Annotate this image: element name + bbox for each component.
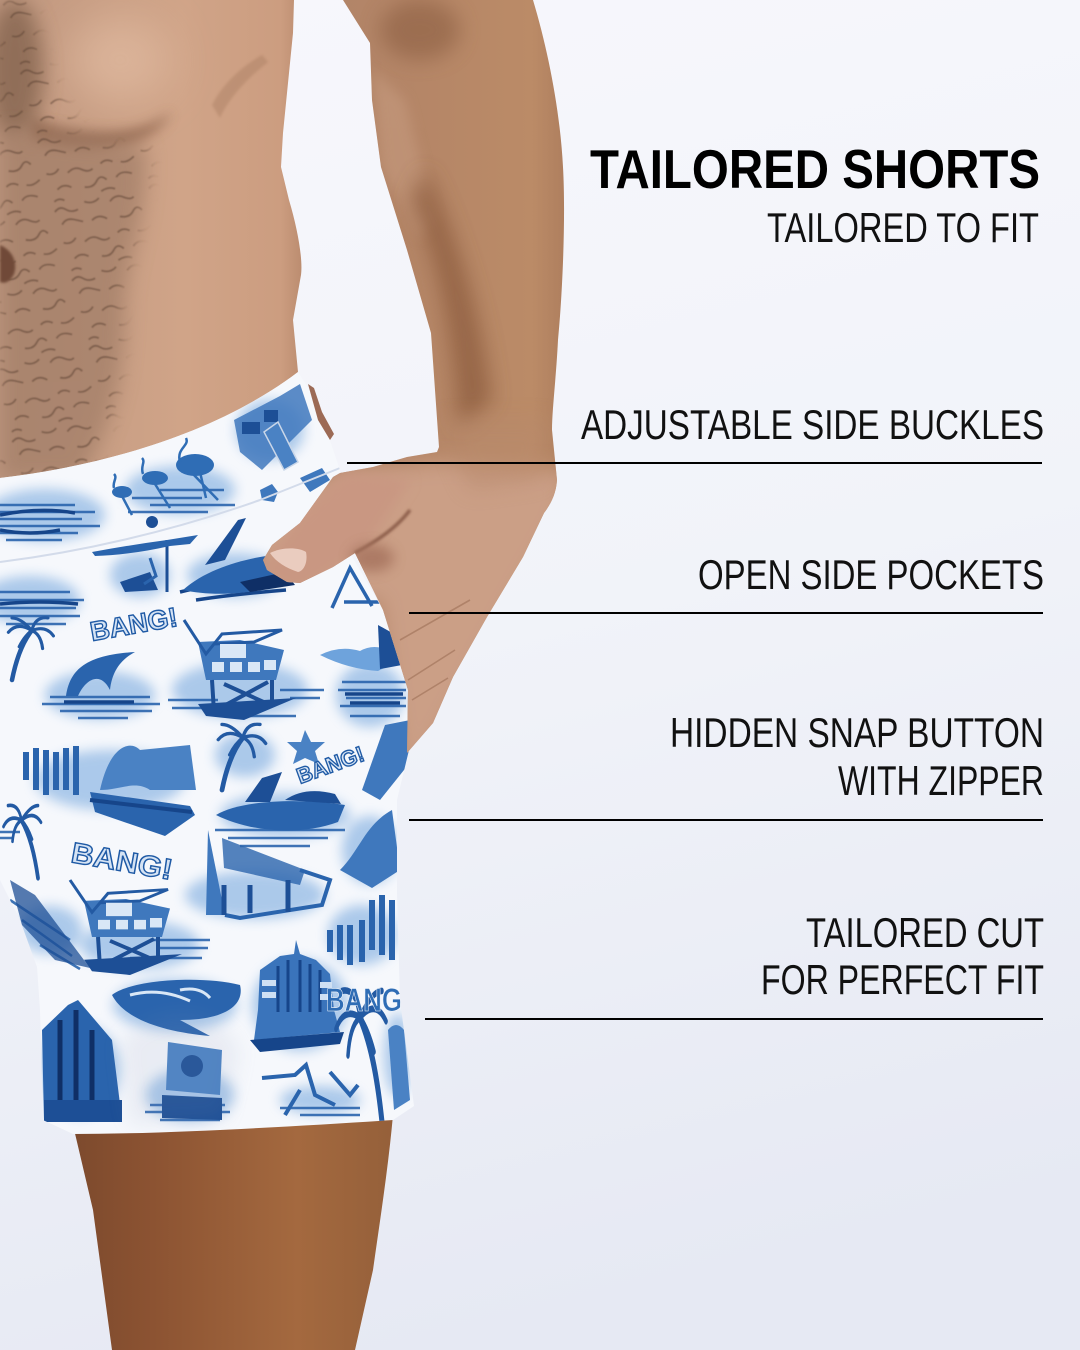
pattern: palm tree left (4, 805, 41, 878)
pattern: soft blue halos (0, 400, 412, 1121)
belly hair tone (0, 130, 146, 480)
fabric shadow (124, 1022, 236, 1122)
pattern: cloud and figure right (320, 568, 402, 671)
callout: hidden snap button with zipper (409, 709, 1044, 820)
pattern: surf wave (112, 980, 241, 1036)
pattern: palm left (8, 618, 53, 680)
rib shadow (212, 55, 268, 118)
pattern: water lines (0, 490, 406, 1120)
pattern: bang lettering: BANG! (293, 741, 367, 789)
pattern: flamingos (112, 438, 218, 528)
pattern: right edge motif (388, 1025, 410, 1110)
side buckle (308, 384, 334, 440)
chest highlight (70, 18, 170, 102)
waistband seam (0, 468, 340, 562)
pattern: dark water (0, 510, 403, 703)
forearm dark band (410, 170, 492, 430)
chest crease shadow (30, 112, 172, 151)
palm shadow (350, 544, 394, 572)
pattern: art deco building (250, 940, 344, 1052)
pattern: runner and dog (262, 1065, 358, 1115)
hand tone (255, 462, 570, 770)
thumb tone (258, 472, 410, 592)
pattern: crowd and party boat (26, 745, 196, 836)
navel (0, 245, 15, 283)
thumb nail (270, 548, 307, 572)
pattern: art deco building left (42, 1000, 122, 1122)
hand wrinkle lines (400, 600, 470, 700)
inner forearm light (372, 70, 435, 240)
pattern: top building and belt loop (234, 384, 330, 502)
pattern: right figure (362, 720, 410, 800)
leg (73, 1115, 393, 1350)
pattern: speedboat one (183, 518, 295, 594)
pattern: truck (162, 1042, 222, 1120)
pattern: star (287, 730, 325, 764)
left chest dark (0, 0, 43, 140)
callout: tailored cut for perfect fit (425, 909, 1044, 1019)
pattern: beach chair (92, 535, 198, 592)
shorts (0, 370, 420, 1140)
thumb crease (355, 510, 410, 553)
pattern: left dark band (10, 880, 90, 968)
pattern: lifeguard tower one (184, 620, 296, 720)
pattern: speedboat two (216, 772, 345, 830)
wrist tone (440, 420, 552, 490)
pattern: bang lettering: BANG! (69, 837, 175, 887)
pattern: bang lettering (69, 602, 402, 1018)
elbow shadow (380, 0, 460, 60)
pattern: volleyball net (206, 830, 330, 918)
pattern: crowd right (330, 895, 392, 965)
pattern: palm right (336, 990, 386, 1122)
arm and hand (255, 0, 580, 770)
hair texture (0, 0, 155, 474)
pattern: bang lettering: BANG! (88, 602, 180, 647)
torso (0, 0, 305, 480)
pattern: bang lettering: BANG (326, 982, 402, 1018)
pattern: dolphin wave (66, 652, 135, 696)
pattern: lifeguard tower two (70, 880, 182, 975)
pattern: palms centre (218, 724, 266, 790)
